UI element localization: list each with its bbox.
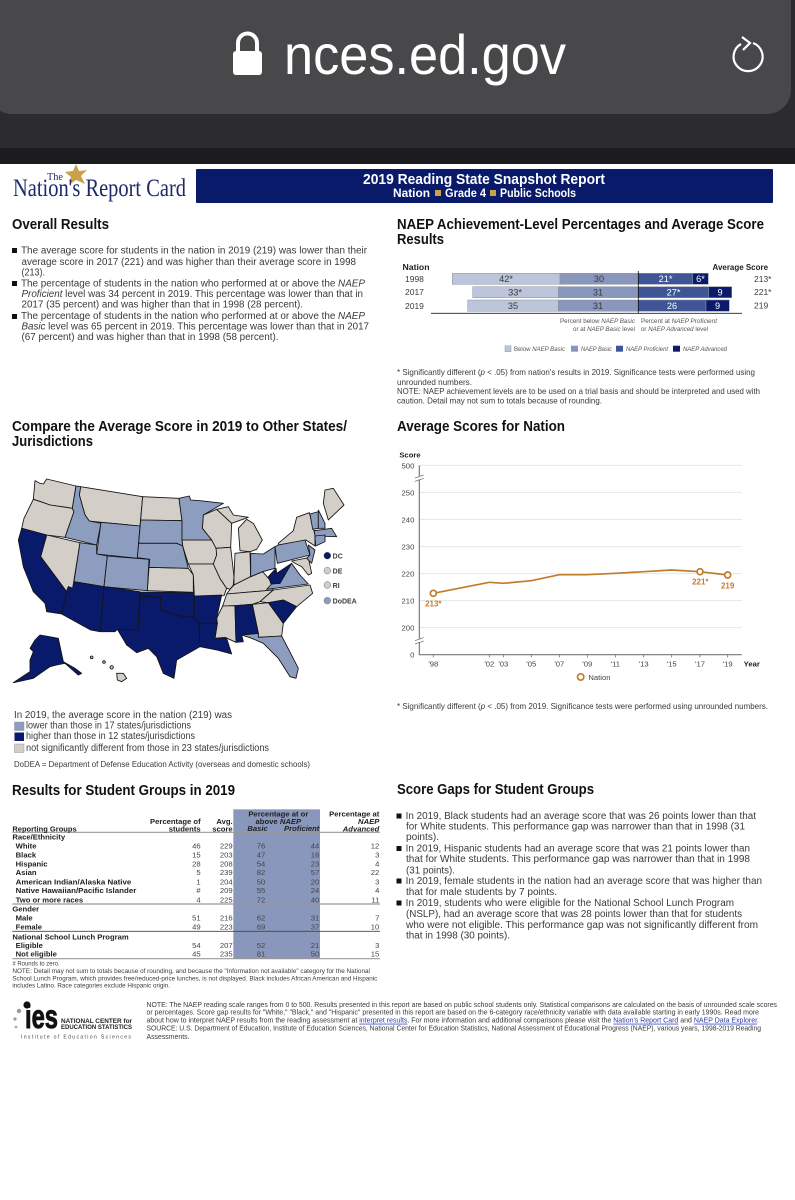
footer note — [146, 1000, 777, 1041]
heading: Results — [397, 232, 444, 248]
column: basic: 69 — [257, 922, 265, 931]
column: percentage of students: 45 — [192, 950, 201, 959]
report title banner: Grade 4 — [445, 188, 487, 200]
line chart: average scores — [399, 450, 760, 682]
table header: students — [169, 825, 201, 834]
stacked bar chart: 9 — [717, 288, 723, 298]
heading: Score Gaps for Student Groups — [397, 782, 594, 798]
column: average score — [220, 842, 233, 959]
footer note: SOURCE: U.S. Department of Education, Institute of Education Sciences, National Center for Education Statistics, National Assessment of Educational Progress (NAEP), various years, 1998-2019 Reading — [146, 1024, 761, 1032]
choropleth map of US states — [13, 479, 357, 683]
column: basic: 76 — [257, 842, 265, 851]
row labels: Female — [16, 922, 42, 931]
series: nation — [425, 569, 735, 608]
column: basic: 62 — [257, 914, 265, 923]
table header: Percentage of — [150, 817, 201, 826]
column: advanced: 10 — [371, 922, 379, 931]
legend: achievement levels: Below NAEP Basic — [514, 346, 566, 353]
column: basic: 55 — [257, 886, 265, 895]
column: proficient: 21 — [311, 941, 319, 950]
bullet list: (213). — [22, 268, 45, 278]
column: proficient: 24 — [311, 886, 320, 895]
column: basic: 82 — [257, 868, 265, 877]
bullet list: In 2019, female students in the nation had an average score that was higher than — [406, 876, 762, 887]
legend: achievement levels: NAEP Advanced — [683, 346, 727, 353]
column: percentage of students: 15 — [192, 850, 201, 859]
column: proficient: 44 — [311, 842, 320, 851]
row labels: Native Hawaiian/Pacific Islander — [16, 886, 136, 895]
panel: achievement levels — [397, 217, 772, 406]
column: proficient: 20 — [311, 877, 319, 886]
table header: Basic — [247, 824, 269, 833]
line chart: average scores: '02 — [484, 660, 494, 669]
map key: In 2019, the average score in the nation (219) was — [14, 710, 232, 721]
stacked bar chart: 2019 — [405, 301, 424, 311]
bullet list: The percentage of students in the nation who performed at or above the NAEP — [21, 278, 366, 290]
line chart: average scores: '03 — [498, 660, 508, 669]
line chart: average scores: 230 — [402, 543, 414, 552]
bullet list: points). — [406, 832, 439, 843]
column: proficient: 40 — [311, 895, 319, 904]
column: basic: 54 — [257, 859, 266, 868]
bullet list — [12, 246, 369, 343]
series: nation: 213* — [425, 599, 442, 608]
bullet list: (67 percent) and was higher than that in 1998 (58 percent). — [22, 332, 278, 343]
line chart: average scores: 500 — [402, 462, 414, 471]
column: average score: 208 — [220, 859, 233, 868]
table notes: NOTE: Detail may not sum to totals because of rounding, and because the "Information not available" category for the National — [12, 969, 370, 975]
row labels: Race/Ethnicity — [12, 833, 66, 842]
stacked bar chart: 2017 — [405, 287, 424, 297]
stacked bar chart: 35 — [508, 301, 518, 311]
footer note: about how to interpret NAEP results from the reading assessment at interpret results. For more information and additional comparisons please visit the Nation's Report Card and NAEP Data Explorer. — [146, 1016, 759, 1025]
icon: reload — [734, 37, 763, 71]
row labels: Not eligible — [16, 950, 57, 959]
stacked bar chart: or at NAEP Basic level — [573, 326, 635, 333]
heading: Overall Results — [12, 217, 109, 233]
stacked bar chart: 27* — [667, 288, 681, 298]
stacked bar chart: 31 — [593, 288, 603, 298]
column: average score: 207 — [220, 941, 233, 950]
icon: gold star — [65, 164, 87, 185]
panel: overall results — [12, 217, 369, 343]
heading — [397, 217, 764, 248]
column: proficient: 23 — [311, 859, 319, 868]
column: proficient: 37 — [311, 922, 319, 931]
logo: The Nation's Report Card: Nation's Report Card — [13, 175, 186, 202]
line chart: average scores: 200 — [402, 624, 414, 633]
chart footnote: * Significantly different (p < .05) from 2019. Significance tests were performed using unrounded numbers. — [397, 701, 768, 711]
column: proficient — [311, 842, 320, 959]
stacked bar chart: 9 — [715, 301, 720, 311]
table header: above NAEP — [256, 817, 302, 826]
line chart: average scores: '98 — [428, 660, 438, 669]
heading: compare states: Jurisdictions — [12, 434, 93, 450]
bullet list: that for male students by 7 points. — [406, 887, 557, 898]
column: percentage of students: 51 — [192, 914, 201, 923]
column: percentage of students: 46 — [192, 842, 201, 851]
map legend: DC DE RI DoDEA: DE — [333, 569, 343, 576]
line chart: average scores: '07 — [554, 660, 564, 669]
column: average score: 216 — [220, 914, 233, 923]
logo: IES: NATIONAL CENTER for — [61, 1018, 133, 1025]
stacked bar chart: 30 — [594, 274, 604, 284]
footnote — [397, 367, 760, 406]
stacked bar chart: Nation — [402, 262, 430, 272]
table header: Reporting Groups — [12, 825, 77, 834]
line chart: average scores: Year — [744, 660, 760, 669]
column: advanced: 4 — [375, 886, 380, 895]
stacked bar chart — [402, 262, 772, 333]
footer note: or percentages. Score gap results for "White," "Black," and "Hispanic" presented in this report are based on the 6-category race/ethnicity variable with data available starting in early 1990s. Read more — [146, 1008, 759, 1017]
legend: achievement levels — [505, 346, 727, 353]
stacked bar chart: 26 — [667, 301, 677, 311]
heading: results for student groups: Results for Student Groups in 2019 — [12, 783, 235, 799]
column: advanced: 7 — [375, 914, 379, 923]
stacked bar chart: 219 — [754, 300, 768, 310]
column: average score: 239 — [220, 868, 233, 877]
footer note: Assessments. — [146, 1032, 190, 1041]
stacked bar chart: 31 — [593, 301, 603, 311]
series: nation: 221* — [692, 577, 709, 586]
line chart: average scores: 0 — [410, 651, 414, 660]
column: basic: 72 — [257, 895, 265, 904]
column: basic: 50 — [257, 877, 265, 886]
line chart: average scores: '13 — [639, 660, 649, 669]
row labels: Two or more races — [16, 895, 83, 904]
line chart: average scores: '09 — [582, 660, 592, 669]
table header: NAEP — [358, 817, 380, 826]
bullet list: (31 points). — [406, 866, 455, 876]
bullet list: Basic level was 65 percent in 2019. This percentage was lower than that in 2017 — [22, 322, 369, 332]
bullet list: for White students. This performance gap was narrower than that in 1998 (31 — [406, 822, 745, 832]
row labels: American Indian/Alaska Native — [16, 877, 131, 886]
column: percentage of students: 54 — [192, 941, 201, 950]
line chart: average scores: '15 — [667, 660, 677, 669]
bullet list: Proficient level was 34 percent in 2019. This percentage was lower than that in — [22, 289, 363, 300]
column: average score: 223 — [220, 922, 233, 931]
table header: Advanced — [342, 825, 380, 834]
table header: Percentage at or — [248, 809, 308, 818]
legend: achievement levels: NAEP Proficient — [626, 346, 669, 353]
stacked bar chart: 1998 — [405, 274, 424, 284]
column: proficient: 57 — [311, 868, 319, 877]
table: student groups — [12, 809, 380, 990]
report title banner: Nation — [393, 188, 430, 200]
bullet list: who were not eligible. This performance gap was not significantly different from — [405, 920, 758, 931]
column: average score: 209 — [220, 886, 233, 895]
column: average score: 203 — [220, 850, 233, 859]
column: average score: 225 — [220, 895, 233, 904]
heading: average scores for nation: Average Scores for Nation — [397, 419, 565, 435]
bullet list: that in 1998 (30 points). — [406, 930, 510, 942]
line chart: average scores: 250 — [402, 489, 414, 498]
bullet list: 2017 (35 percent) and was higher than that in 1998 (28 percent). — [22, 300, 303, 310]
report title banner — [196, 169, 773, 203]
report title banner: 2019 Reading State Snapshot Report — [363, 172, 605, 188]
row labels: White — [16, 842, 37, 851]
column: basic: 52 — [257, 941, 265, 950]
column: proficient: 18 — [311, 850, 319, 859]
line chart: average scores: '05 — [526, 660, 536, 669]
stacked bar chart: Percent below NAEP Basic — [560, 318, 636, 325]
table header: Proficient — [284, 824, 320, 833]
logo: The Nation's Report Card: The — [47, 172, 64, 183]
bullet list: In 2019, Black students had an average score that was 26 points lower than that — [406, 811, 756, 822]
footnote: caution. Detail may not sum to totals because of rounding. — [397, 396, 602, 406]
logo: IES — [13, 998, 133, 1040]
table notes: # Rounds to zero. — [12, 961, 60, 967]
table notes: includes Latino. Race categories exclude Hispanic origin. — [12, 984, 170, 990]
bullet list: In 2019, Hispanic students had an average score that was 21 points lower than — [406, 844, 750, 854]
bullet list: average score in 2017 (221) and was higher than their average score in 1998 — [22, 257, 356, 268]
column: basic: 47 — [257, 850, 265, 859]
row labels: Eligible — [16, 941, 43, 950]
column: percentage of students: 4 — [196, 895, 201, 904]
line chart: average scores: '17 — [695, 660, 705, 669]
stacked bar chart: 42* — [499, 274, 513, 284]
map key — [14, 710, 310, 769]
column: percentage of students — [192, 842, 201, 959]
column: advanced: 22 — [371, 868, 379, 877]
row labels: Black — [16, 850, 37, 859]
column: average score: 204 — [220, 877, 233, 886]
bullet list — [396, 811, 762, 942]
heading: compare states — [12, 419, 347, 450]
column: advanced: 3 — [375, 877, 379, 886]
column: advanced — [371, 842, 380, 959]
row labels: National School Lunch Program — [12, 932, 129, 941]
line chart: average scores: '11 — [611, 660, 620, 669]
row labels — [12, 833, 136, 959]
stacked bar chart: Percent at NAEP Proficient — [641, 318, 718, 325]
bullet list: (NSLP), had an average score that was 28 points lower than that for students — [406, 909, 742, 920]
column: advanced: 11 — [371, 895, 379, 904]
line chart: average scores: 210 — [402, 597, 414, 606]
chart legend — [577, 673, 610, 682]
map key: DoDEA = Department of Defense Education Activity (overseas and domestic schools) — [14, 759, 310, 769]
panel: score gaps — [396, 782, 762, 942]
stacked bar chart: 33* — [508, 288, 522, 298]
footnote: unrounded numbers. — [397, 377, 472, 387]
url text: nces.ed.gov — [284, 23, 566, 86]
line chart: average scores: 220 — [402, 570, 414, 579]
table header: score — [212, 825, 233, 834]
stacked bar chart: Average Score — [712, 262, 768, 272]
column: average score: 229 — [220, 842, 233, 851]
column: percentage of students: 5 — [196, 868, 201, 877]
line chart: average scores: 240 — [402, 516, 414, 525]
row labels: Asian — [16, 868, 37, 877]
map legend: DC DE RI DoDEA: DoDEA — [333, 599, 357, 606]
column: advanced: 15 — [371, 950, 379, 959]
chart legend: Nation — [588, 673, 610, 682]
map key: higher than those in 12 states/jurisdictions — [26, 731, 195, 742]
series: nation: 219 — [721, 581, 735, 590]
report title banner: Public Schools — [500, 188, 576, 200]
logo: IES: Institute of Education Sciences — [21, 1034, 131, 1040]
map key: not significantly different from those in 23 states/jurisdictions — [26, 743, 269, 754]
column: advanced: 3 — [375, 941, 379, 950]
row labels: Gender — [12, 904, 39, 913]
column: proficient: 50 — [311, 950, 319, 959]
line chart: average scores: '19 — [723, 660, 733, 669]
browser address bar — [0, 0, 795, 164]
map legend: DC DE RI DoDEA: RI — [333, 583, 340, 590]
footnote: * Significantly different (p < .05) from nation's results in 2019. Significance tests were performed using — [397, 367, 755, 377]
column: proficient: 31 — [311, 914, 319, 923]
stacked bar chart: 6* — [696, 274, 705, 284]
map legend: DC DE RI DoDEA — [324, 552, 357, 606]
table notes — [12, 961, 377, 990]
row labels: Hispanic — [16, 859, 48, 868]
icon: padlock — [233, 34, 262, 75]
table header — [12, 809, 380, 834]
map key: lower than those in 17 states/jurisdictions — [26, 720, 191, 732]
logo: The Nation's Report Card — [13, 164, 186, 202]
line chart: average scores: Score — [399, 450, 421, 459]
column: percentage of students: # — [196, 886, 201, 895]
logo: IES: EDUCATION STATISTICS — [61, 1024, 132, 1031]
column: percentage of students: 28 — [192, 859, 201, 868]
column: average score: 235 — [220, 950, 233, 959]
stacked bar chart: or NAEP Advanced level — [641, 326, 708, 333]
bullet list: The percentage of students in the nation who performed at or above the NAEP — [21, 311, 366, 322]
stacked bar chart: 221* — [754, 287, 772, 297]
bullet list: that for White students. This performance gap was narrower than that in 1998 — [406, 854, 750, 865]
logo: IES: ies — [25, 998, 58, 1035]
footnote: NOTE: NAEP achievement levels are to be used on a trial basis and should be interpreted and used with — [397, 386, 760, 396]
column: basic — [257, 842, 266, 959]
column: percentage of students: 49 — [192, 922, 201, 931]
table header: Avg. — [216, 817, 233, 826]
heading: compare states: Compare the Average Score in 2019 to Other States/ — [12, 419, 347, 435]
column: advanced: 3 — [375, 850, 379, 859]
stacked bar chart: 21* — [659, 274, 673, 284]
column: advanced: 12 — [371, 842, 379, 851]
footer note: NOTE: The NAEP reading scale ranges from 0 to 500. Results presented in this report are based on public school students only. Statistical comparisons are calculated on the basis of unrounded scale scores — [146, 1000, 777, 1009]
row labels: Male — [16, 914, 33, 923]
bullet list: In 2019, students who were eligible for the National School Lunch Program — [406, 898, 734, 909]
table notes: School Lunch Program, which provides free/reduced-price lunches, is not displayed. Black includes African American and Hispanic — [12, 976, 377, 982]
column: percentage of students: 1 — [196, 877, 201, 886]
column: advanced: 4 — [375, 859, 380, 868]
table header: Percentage at — [329, 809, 380, 818]
column: basic: 81 — [257, 950, 265, 959]
stacked bar chart: 213* — [754, 274, 772, 284]
legend: achievement levels: NAEP Basic — [581, 346, 613, 353]
map legend: DC DE RI DoDEA: DC — [333, 554, 343, 561]
bullet list: The average score for students in the nation in 2019 (219) was lower than their — [21, 246, 368, 256]
heading: NAEP Achievement-Level Percentages and Average Score — [397, 217, 764, 233]
